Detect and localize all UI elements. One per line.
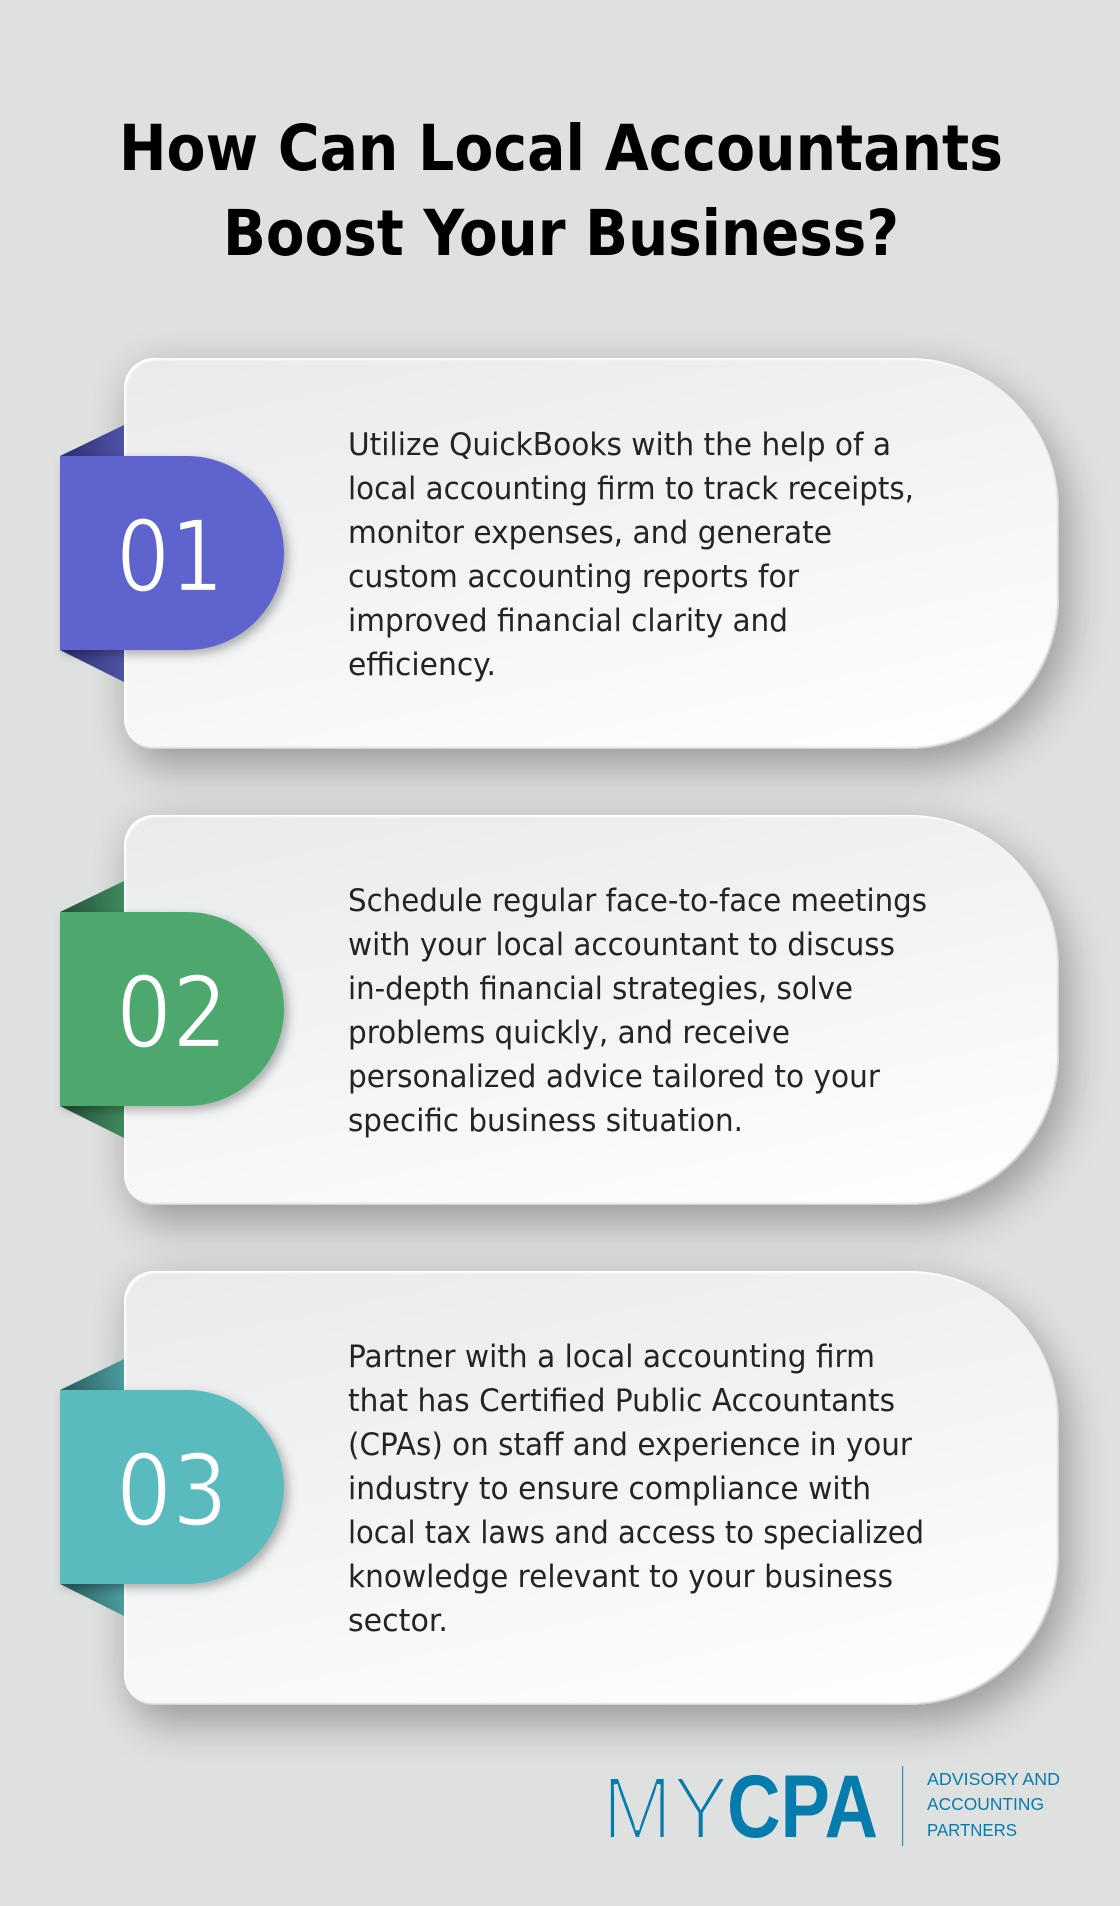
number badge <box>60 912 284 1106</box>
step 3 description: sector. <box>348 1603 448 1639</box>
step 1 description: improved financial clarity and <box>348 603 788 639</box>
logo tagline: PARTNERS <box>927 1820 1017 1840</box>
step 3 badge and text <box>58 1339 924 1639</box>
bottom fold <box>60 1584 124 1616</box>
panel: step 2 <box>58 802 1091 1246</box>
step 2 description: specific business situation. <box>348 1103 743 1139</box>
step 2 description: problems quickly, and receive <box>348 1015 790 1051</box>
card background <box>124 1271 1059 1705</box>
panel: step 1 <box>58 346 1091 790</box>
number 01: 01 <box>116 500 224 615</box>
top fold <box>60 881 124 912</box>
step 3 description: that has Certified Public Accountants <box>348 1383 895 1419</box>
number 03: 03 <box>116 1434 228 1549</box>
step 1 description: custom accounting reports for <box>348 559 799 595</box>
logo wordmark CPA: CPA <box>727 1756 878 1856</box>
step 3 description: knowledge relevant to your business <box>348 1559 893 1595</box>
top fold <box>60 1359 124 1390</box>
step 1 description: monitor expenses, and generate <box>348 515 832 551</box>
title: Boost Your Business? <box>223 197 899 270</box>
step 2 description: in-depth financial strategies, solve <box>348 971 853 1007</box>
bottom fold <box>60 650 124 682</box>
top fold <box>60 425 124 456</box>
number badge <box>60 456 284 650</box>
step 2 description: personalized advice tailored to your <box>348 1059 880 1095</box>
step 1 description <box>348 427 914 683</box>
step 3 description: local tax laws and access to specialized <box>348 1515 924 1551</box>
logo tagline <box>927 1769 1060 1840</box>
logo divider <box>902 1766 903 1846</box>
number 02: 02 <box>116 956 228 1071</box>
step 3 description: Partner with a local accounting firm <box>348 1339 875 1375</box>
panel: step 3 <box>58 1258 1091 1746</box>
title: How Can Local Accountants <box>119 112 1003 185</box>
step 3 description: (CPAs) on staff and experience in your <box>348 1427 912 1463</box>
step 1 description: efficiency. <box>348 647 496 683</box>
card background <box>124 815 1059 1205</box>
card background <box>124 358 1059 749</box>
step 1 badge and text <box>58 425 914 683</box>
step 2 description: with your local accountant to discuss <box>348 927 895 963</box>
title <box>119 112 1003 270</box>
step 2 description <box>348 883 927 1139</box>
logo tagline: ACCOUNTING <box>927 1794 1044 1814</box>
step 2 badge and text <box>58 881 927 1139</box>
logo wordmark MY: MY <box>602 1759 729 1859</box>
logo tagline: ADVISORY AND <box>927 1769 1060 1789</box>
number badge <box>60 1390 284 1584</box>
step 2 description: Schedule regular face-to-face meetings <box>348 883 927 919</box>
step 1 description: local accounting firm to track receipts, <box>348 471 914 507</box>
bottom fold <box>60 1106 124 1138</box>
step 1 description: Utilize QuickBooks with the help of a <box>348 427 891 463</box>
step 3 description: industry to ensure compliance with <box>348 1471 871 1507</box>
step 3 description <box>348 1339 924 1639</box>
